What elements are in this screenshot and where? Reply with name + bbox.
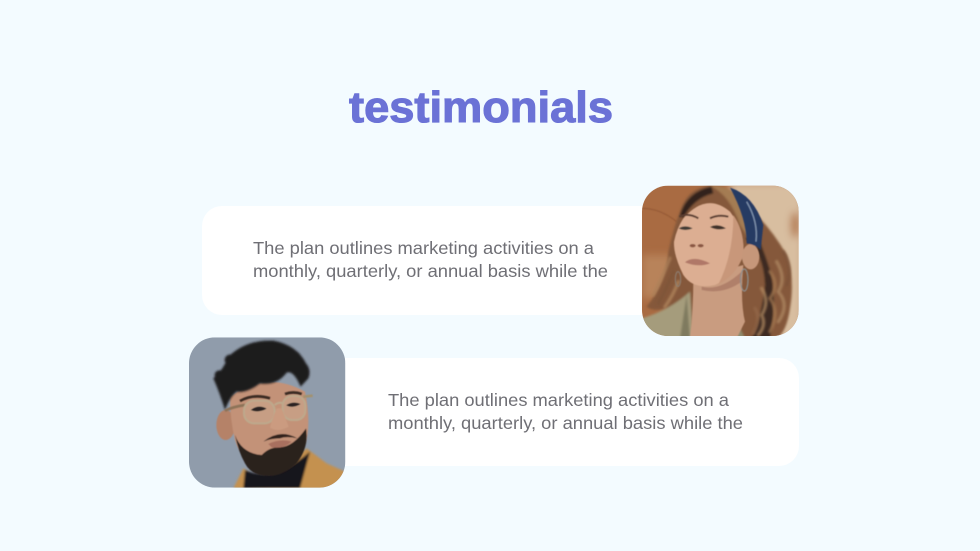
hair — [213, 341, 310, 410]
text block: testimonial two quote: The plan outlines marketing activities on a — [388, 390, 729, 410]
photo: woman with headband — [642, 182, 803, 338]
brows — [240, 392, 302, 401]
ear — [742, 244, 759, 269]
card: testimonial two — [202, 358, 799, 466]
text block: testimonial two quote — [388, 390, 743, 433]
face — [673, 202, 734, 286]
panel: testimonial two — [189, 337, 799, 490]
black collar — [243, 452, 310, 488]
ear — [216, 410, 235, 440]
text block: testimonial one quote: monthly, quarterly, or annual basis while the — [253, 261, 608, 281]
text block: testimonial one quote: The plan outlines marketing activities on a — [253, 238, 594, 258]
beard — [235, 428, 307, 476]
brows and eyes — [679, 215, 728, 218]
text block: testimonial one quote — [253, 238, 608, 281]
nose — [271, 409, 288, 429]
curls — [653, 252, 789, 335]
clothing — [642, 292, 693, 338]
earrings — [741, 269, 748, 291]
face — [230, 382, 309, 456]
title: testimonials — [349, 83, 613, 132]
glasses — [225, 405, 245, 411]
card: testimonial one — [202, 206, 799, 315]
photo: man with glasses — [189, 337, 345, 490]
headband — [730, 188, 763, 250]
text block: testimonial two quote: monthly, quarterly, or annual basis while the — [388, 413, 743, 433]
neck — [690, 265, 745, 338]
panel: testimonial one — [202, 182, 803, 338]
nose and lips — [690, 244, 696, 247]
jacket — [233, 448, 345, 490]
eyes — [251, 407, 267, 411]
hair — [647, 186, 792, 338]
